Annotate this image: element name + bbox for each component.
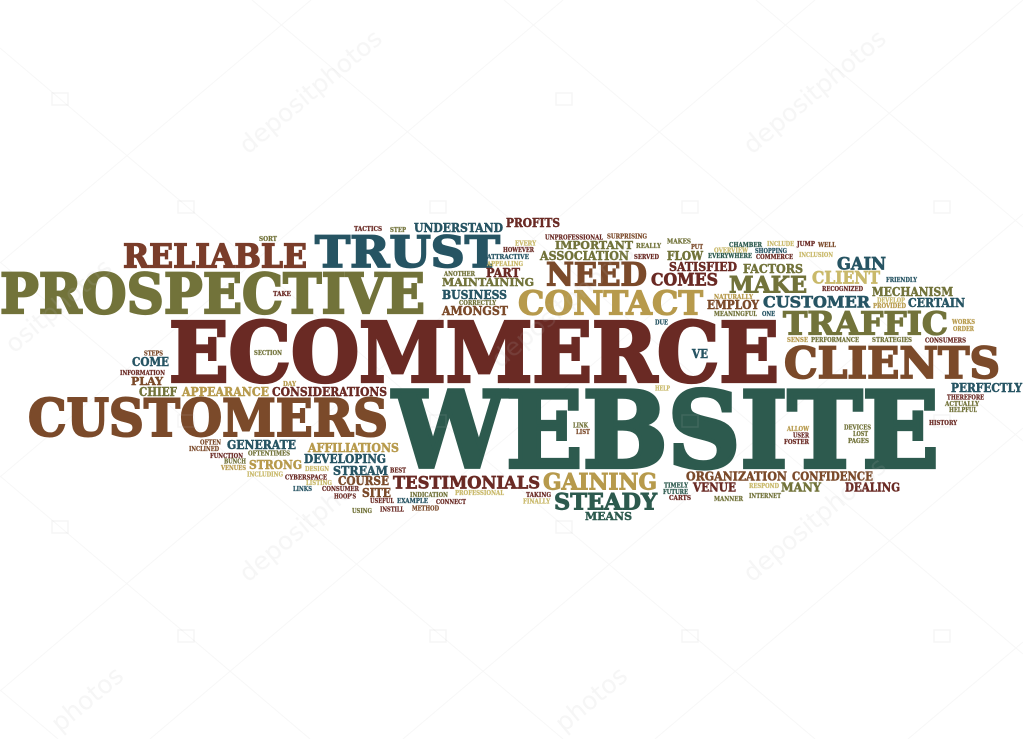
small words: top cluster: TAKE <box>273 290 291 298</box>
small words: lower right cluster: FUTURE <box>663 488 688 496</box>
small words: left cluster: USEFUL <box>370 497 394 505</box>
small words: left cluster: INCLINED <box>189 445 219 453</box>
word: CLIENTS: CLIENTS <box>784 339 1000 389</box>
small words: left cluster: OFTENTIMES <box>248 450 290 458</box>
word: NEED: NEED <box>546 256 647 294</box>
small words: top cluster: OVERVIEW <box>714 246 749 254</box>
word: MAKE: MAKE <box>729 272 807 298</box>
small words inside WEBSITE <box>573 384 871 446</box>
word: COME: COME <box>132 355 169 369</box>
small words: top cluster: SERVED <box>634 253 659 261</box>
small words: right cluster: PERFORMANCE <box>811 336 859 344</box>
watermark: photos <box>45 661 129 738</box>
small words: top cluster: SORT <box>259 235 277 243</box>
small words: top cluster: TACTICS <box>354 225 382 233</box>
small words: left cluster: SECTION <box>254 349 282 357</box>
word: COURSE: COURSE <box>338 473 389 488</box>
small words: lower right cluster: INTERNET <box>749 492 781 500</box>
small words inside WEBSITE: USER <box>793 432 809 440</box>
small words: left cluster: LINKS <box>293 485 312 493</box>
word: WEBSITE: WEBSITE <box>392 368 939 492</box>
small words: right cluster: STRATEGIES <box>872 336 912 344</box>
word: FLOW: FLOW <box>667 249 703 263</box>
small words: right cluster: THEREFORE <box>947 394 984 402</box>
word: VENUE: VENUE <box>692 480 736 494</box>
watermark: depositphotos <box>485 237 640 374</box>
small words: left cluster: HOOP'S <box>334 492 356 500</box>
word: ECOMMERCE: ECOMMERCE <box>169 306 779 402</box>
small words: top cluster: ANOTHER <box>443 270 475 278</box>
small words: top cluster: NATURALLY <box>714 293 753 301</box>
word: CUSTOMER: CUSTOMER <box>763 292 870 312</box>
word: PROSPECTIVE: PROSPECTIVE <box>0 261 425 326</box>
word: RELIABLE: RELIABLE <box>123 236 307 276</box>
word: COMES: COMES <box>651 270 718 290</box>
small words: left cluster: INSTILL <box>380 506 404 514</box>
watermark: depositphotos <box>737 451 892 588</box>
word: CLIENT: CLIENT <box>812 268 880 288</box>
word: MAINTAINING: MAINTAINING <box>442 275 534 289</box>
word: MECHANISM: MECHANISM <box>872 285 953 299</box>
small words: left cluster: CYBERSPACE <box>285 474 327 482</box>
word: STEADY: STEADY <box>554 490 657 516</box>
word: CERTAIN: CERTAIN <box>908 296 965 310</box>
small words: top cluster: EVERYWHERE <box>708 252 752 260</box>
small words: lower right cluster: RESPOND <box>749 482 779 490</box>
small words: left cluster: OFTEN <box>200 438 221 446</box>
watermark: depositphotos <box>737 23 892 160</box>
watermark: photos <box>549 661 633 738</box>
small words: top cluster: ATTRACTIVE <box>486 253 529 261</box>
small words: lower right cluster: MANNER <box>714 495 743 503</box>
small words: right cluster: INCLUSION <box>799 251 833 259</box>
word: CHIEF: CHIEF <box>139 385 177 399</box>
small words: lower right cluster <box>663 482 781 503</box>
word: IMPORTANT: IMPORTANT <box>555 238 633 252</box>
word: CONSIDERATIONS: CONSIDERATIONS <box>272 385 387 399</box>
word: UNDERSTAND: UNDERSTAND <box>414 221 503 235</box>
small words: left cluster: STEPS <box>144 350 163 358</box>
small words: right cluster: RECOGNIZED <box>822 285 863 293</box>
small words: right cluster: ORDER <box>953 325 974 333</box>
word cloud <box>0 216 1022 523</box>
word: AFFILIATIONS: AFFILIATIONS <box>307 440 399 455</box>
word: DEVELOPING: DEVELOPING <box>304 451 386 466</box>
small words inside WEBSITE: HELP <box>655 384 670 392</box>
word: SATISFIED: SATISFIED <box>669 260 737 274</box>
word: CONTACT: CONTACT <box>518 284 703 322</box>
small words: left cluster: METHOD <box>412 504 439 512</box>
small words: right cluster: HISTORY <box>929 419 957 427</box>
small words: left cluster: INDICATION <box>410 491 448 499</box>
small words: top cluster: MEANINGFUL <box>714 310 757 318</box>
word: MEANS: MEANS <box>585 509 632 523</box>
small words: lower right cluster: CARTS <box>669 494 691 502</box>
small words: top cluster: INCLUDE <box>767 240 794 248</box>
small words: right cluster: WELL <box>817 241 836 249</box>
word: CONFIDENCE: CONFIDENCE <box>792 468 873 484</box>
small words: left cluster: DAY <box>283 380 296 388</box>
small words inside WEBSITE: PAGES <box>848 437 869 445</box>
small words: left cluster: CONNECT <box>436 498 466 506</box>
small words: top cluster: COMMERCE <box>756 253 793 261</box>
word: PART: PART <box>486 266 520 280</box>
watermark: depositphotos <box>233 23 388 160</box>
word: APPEARANCE: APPEARANCE <box>181 385 269 399</box>
small words: top cluster: CHAMBER <box>729 241 762 249</box>
small words: top cluster: UNPROFESSIONAL <box>545 234 603 242</box>
small words: right cluster: CONSUMERS <box>925 336 966 344</box>
small words: right cluster: SENSE <box>787 336 808 344</box>
word: STREAM: STREAM <box>333 463 388 478</box>
small words: left cluster: INFORMATION <box>120 369 165 377</box>
small words: left cluster: BUNCH <box>224 458 246 466</box>
word: TRAFFIC: TRAFFIC <box>783 306 948 342</box>
small words: left cluster: TAKING <box>526 491 551 499</box>
small words: left cluster: PROFESSIONAL <box>455 489 504 497</box>
word: AMONGST: AMONGST <box>441 304 508 318</box>
small words: top cluster: REALLY <box>636 242 661 250</box>
small words: left cluster: CONSUMER <box>322 485 359 493</box>
word: TRUST: TRUST <box>315 228 500 278</box>
word: ORGANIZATION: ORGANIZATION <box>686 468 787 484</box>
small words inside WEBSITE: FOSTER <box>784 438 809 446</box>
word: TESTIMONIALS: TESTIMONIALS <box>393 474 540 494</box>
small words: top cluster: PUT <box>691 243 703 251</box>
small words: top cluster: HOWEVER <box>503 246 534 254</box>
small words: top cluster: APPEALING <box>486 260 523 268</box>
small words: right cluster: HELPFUL <box>949 406 977 414</box>
small words: top cluster: ONE <box>762 310 775 318</box>
small words: left cluster: FUNCTION <box>210 452 243 460</box>
word: PLAY: PLAY <box>131 374 164 388</box>
word: STRONG: STRONG <box>249 457 302 472</box>
small words: left cluster: FINALLY <box>523 498 550 506</box>
small words: right cluster: DEVELOP <box>877 296 905 304</box>
word: ASSOCIATION: ASSOCIATION <box>539 249 629 263</box>
word: GAINING: GAINING <box>543 470 657 496</box>
watermark: ositphotos <box>0 253 118 359</box>
small words: right cluster: FRIENDLY <box>886 276 917 284</box>
word: FACTORS: FACTORS <box>743 262 803 276</box>
small words: top cluster: MAKES <box>667 238 691 246</box>
small words inside WEBSITE: LOST <box>853 430 868 438</box>
small words: right cluster: ACTUALLY <box>944 400 979 408</box>
small words: left cluster: INCLUDING <box>247 470 283 478</box>
small words inside WEBSITE: ALLOW <box>786 425 810 433</box>
small words: top cluster: DUE <box>655 318 668 326</box>
small words: top cluster: SHOPPING <box>755 247 787 255</box>
word: MANY: MANY <box>781 480 822 494</box>
small words: top cluster: CORRECTLY <box>459 299 496 307</box>
small words: left cluster <box>120 349 551 515</box>
small words: right cluster: JUMP <box>796 240 815 248</box>
watermark: depositphotos <box>233 451 388 588</box>
word: SITE: SITE <box>362 485 391 500</box>
word: DEALING: DEALING <box>845 480 900 494</box>
small words: left cluster: EXAMPLE <box>397 497 428 505</box>
small words: top cluster: EVERY <box>515 240 536 248</box>
word: BUSINESS: BUSINESS <box>442 287 507 302</box>
small words: left cluster: VENUES <box>220 464 246 472</box>
small words inside WEBSITE: DEVICES <box>844 424 871 432</box>
word: PROFITS: PROFITS <box>506 216 560 230</box>
small words: right cluster <box>787 240 984 427</box>
small words: left cluster: BEST <box>390 466 406 474</box>
word: GAIN: GAIN <box>837 254 886 274</box>
word: EMPLOY: EMPLOY <box>707 297 760 312</box>
small words: right cluster: WORKS <box>951 318 975 326</box>
small words: left cluster: LISTING <box>306 479 332 487</box>
small words: lower right cluster: TIMELY <box>664 482 688 490</box>
small words: right cluster: PROVIDED <box>873 302 906 310</box>
word: CUSTOMERS: CUSTOMERS <box>28 389 388 449</box>
word: VE: VE <box>691 347 708 361</box>
small words: top cluster: STEP <box>390 226 406 234</box>
small words inside WEBSITE: LINK <box>573 422 588 430</box>
small words inside WEBSITE: LIST <box>576 428 590 436</box>
small words: top cluster: SURPRISING <box>607 232 647 240</box>
small words: left cluster: USING <box>352 507 372 515</box>
small words: left cluster: DESIGN <box>305 465 329 473</box>
small words: top cluster <box>259 225 794 326</box>
word: GENERATE: GENERATE <box>227 438 296 452</box>
